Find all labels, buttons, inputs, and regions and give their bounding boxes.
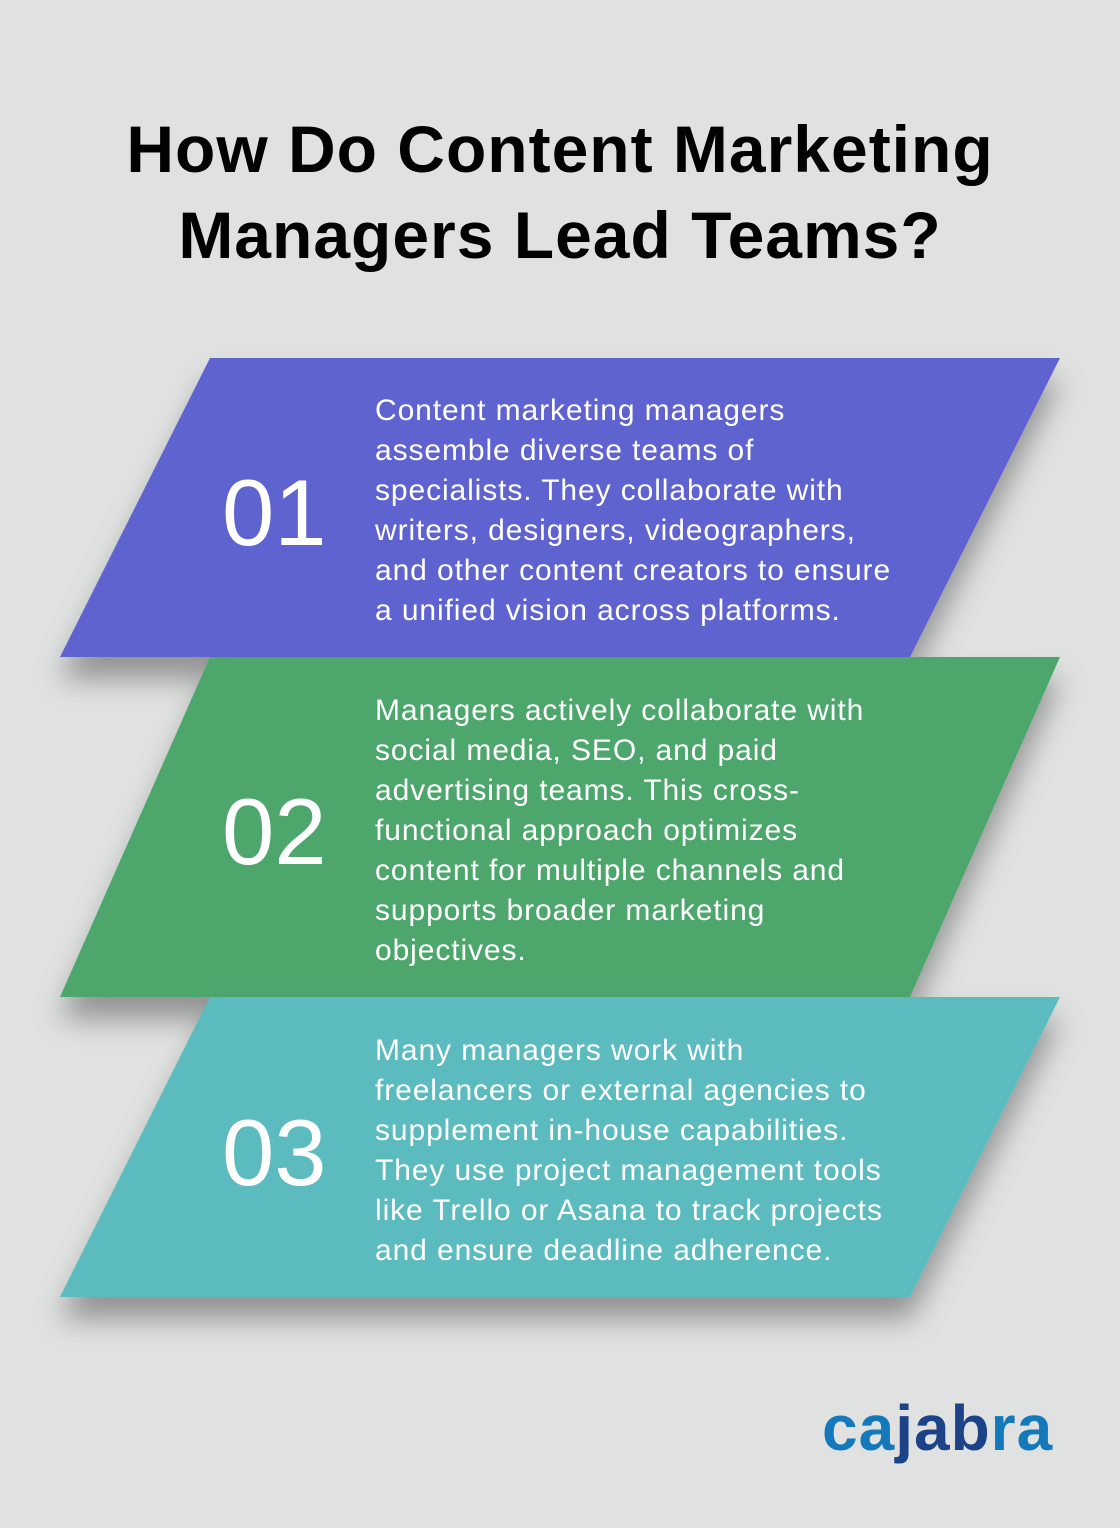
text 01: a unified vision across platforms. (375, 594, 841, 627)
panel 01 (60, 358, 1060, 657)
text 03: like Trello or Asana to track projects (375, 1194, 883, 1227)
text 02: advertising teams. This cross- (375, 774, 800, 807)
text 01: writers, designers, videographers, (374, 514, 856, 547)
number 03: 03 (222, 1100, 327, 1205)
text 01: assemble diverse teams of (375, 434, 754, 467)
text 01: Content marketing managers (375, 394, 785, 427)
title (126, 112, 994, 272)
number 01: 01 (222, 460, 327, 565)
text 02: social media, SEO, and paid (375, 734, 778, 767)
number 02: 02 (222, 779, 327, 884)
text 03: freelancers or external agencies to (375, 1074, 867, 1107)
panel 03 (60, 997, 1060, 1297)
text 02: objectives. (375, 934, 527, 967)
text 02: Managers actively collaborate with (375, 694, 864, 727)
text 03: They use project management tools (375, 1154, 882, 1187)
title: How Do Content Marketing (126, 112, 994, 186)
text 02: supports broader marketing (375, 894, 765, 927)
logo: cajabra (822, 1392, 1053, 1464)
panel 02 (60, 657, 1060, 997)
text 02: functional approach optimizes (375, 814, 798, 847)
title: Managers Lead Teams? (178, 198, 942, 272)
text 03: Many managers work with (375, 1034, 744, 1067)
text 02: content for multiple channels and (375, 854, 845, 887)
text 03: supplement in-house capabilities. (375, 1114, 848, 1147)
text 01: and other content creators to ensure (375, 554, 891, 587)
text 03: and ensure deadline adherence. (375, 1234, 832, 1267)
text 01: specialists. They collaborate with (375, 474, 844, 507)
